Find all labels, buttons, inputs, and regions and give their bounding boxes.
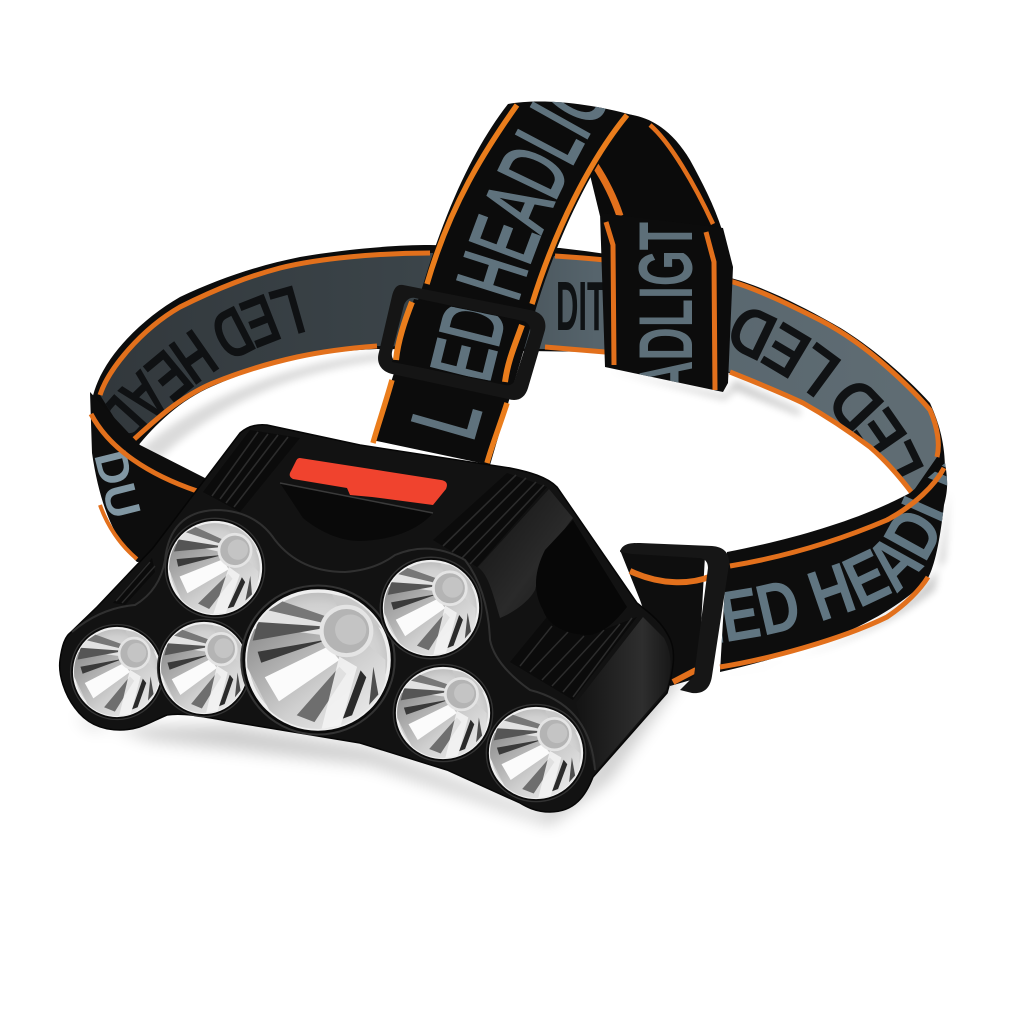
- lens: far left: [71, 624, 163, 720]
- left front band: [84, 392, 205, 562]
- side surface right: [576, 617, 671, 772]
- woven text: lower strap: L: [393, 388, 501, 449]
- strap slider buckle: [378, 285, 545, 400]
- woven text: inside slider: ED: [413, 293, 525, 390]
- side recess: [536, 520, 627, 635]
- front face contour: [72, 510, 595, 770]
- switch socket: [280, 483, 433, 541]
- ribs: upper right: [433, 473, 547, 567]
- ribs: upper left: [203, 430, 300, 512]
- lens: upper left: [161, 514, 269, 623]
- ribs: lower right: [510, 617, 637, 700]
- side buckle: [620, 543, 729, 693]
- head strap: rear section: [590, 114, 722, 230]
- soft floor shadows: [75, 352, 950, 825]
- lens: upper right: [380, 557, 482, 660]
- lens: inner left: [158, 619, 250, 718]
- strap loop with HEADLIGHT text: ADLIGT: [638, 222, 692, 382]
- rear band: inner grey side: DIT: [556, 267, 606, 345]
- head strap: front section with LED HEADLIGHT text: [370, 102, 632, 464]
- woven text: left band: DU: [84, 445, 151, 523]
- orange stripes: [100, 253, 938, 493]
- lamp head: [60, 425, 674, 812]
- lens: large centre: [241, 585, 395, 736]
- head body: [60, 425, 674, 812]
- lens: far right: [486, 704, 586, 802]
- lens: inner right: [393, 664, 493, 762]
- red switch button: [290, 458, 447, 505]
- rear band: inner grey side: [93, 245, 945, 494]
- woven text: right inside: LED LED: [731, 309, 924, 477]
- side surface upper: [478, 489, 573, 618]
- illustration: LED headlamp: [58, 102, 950, 830]
- right front band with LED HEADLIGHT text: [720, 463, 948, 672]
- ribs: lower left: [113, 558, 155, 605]
- strap loop with HEADLIGHT text: [600, 214, 733, 392]
